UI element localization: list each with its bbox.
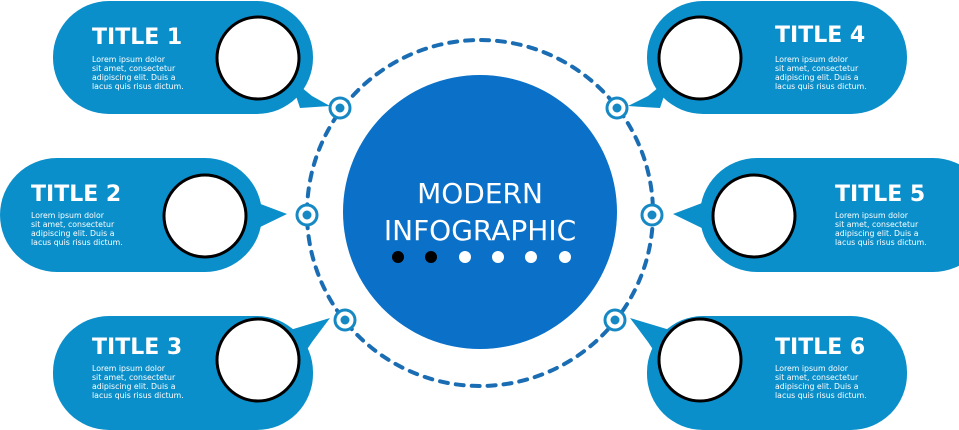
panel 6 [630,316,907,430]
panel 2: sit amet, consectetur [31,220,115,229]
panel 1 [53,1,330,114]
panel 4: Lorem ipsum dolor [775,55,849,64]
dots [392,251,571,263]
panel 2: TITLE 2 [31,182,121,207]
panel 2: adipiscing elit. Duis a [31,229,115,238]
panel 5: Lorem ipsum dolor [835,211,909,220]
panel 2: Lorem ipsum dolor [31,211,105,220]
panel 3: sit amet, consectetur [92,373,176,382]
panel 5: lacus quis risus dictum. [835,238,927,247]
panel 4: lacus quis risus dictum. [775,82,867,91]
panel 3: Lorem ipsum dolor [92,364,166,373]
panel 4: sit amet, consectetur [775,64,859,73]
panel 4: TITLE 4 [775,23,865,48]
panel 1: sit amet, consectetur [92,64,176,73]
panel 1: adipiscing elit. Duis a [92,73,176,82]
panel 6: Lorem ipsum dolor [775,364,849,373]
panel 3: TITLE 3 [92,335,182,360]
panel 2 [0,158,287,272]
central circle [343,75,617,349]
panel 4 [628,1,907,114]
panel 1: Lorem ipsum dolor [92,55,166,64]
panel 3: adipiscing elit. Duis a [92,382,176,391]
panel 5: TITLE 5 [835,182,925,207]
node markers [297,98,662,330]
panel 6: lacus quis risus dictum. [775,391,867,400]
dashed ring [307,40,653,386]
panel 6: TITLE 6 [775,335,865,360]
panel 1: TITLE 1 [92,25,182,50]
panel 2: lacus quis risus dictum. [31,238,123,247]
panel 4: adipiscing elit. Duis a [775,73,859,82]
panel 6: adipiscing elit. Duis a [775,382,859,391]
panel 5: sit amet, consectetur [835,220,919,229]
heading: MODERN [417,177,543,210]
panel 5 [673,158,959,272]
panel 3: lacus quis risus dictum. [92,391,184,400]
panel 1: lacus quis risus dictum. [92,82,184,91]
panel 3 [53,316,330,430]
panel 5: adipiscing elit. Duis a [835,229,919,238]
panel 6: sit amet, consectetur [775,373,859,382]
central circle: INFOGRAPHIC [384,214,576,247]
